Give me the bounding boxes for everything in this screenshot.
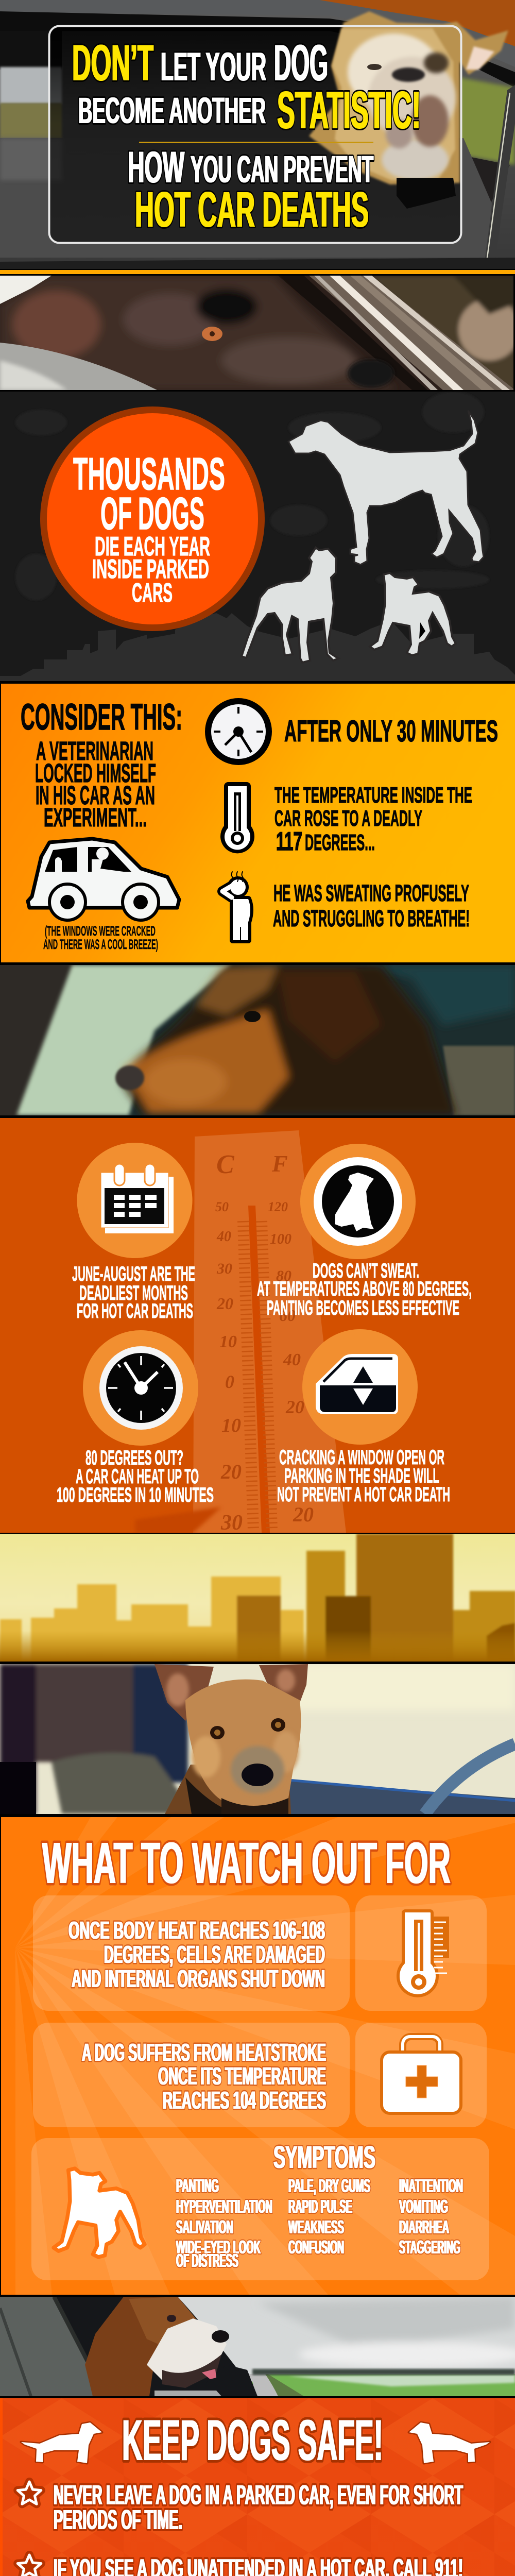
symptoms list: HYPERVENTILATION [176,2196,272,2217]
panel: deadly facts [0,1118,515,1535]
card: thermometer icon [355,1895,487,2011]
icon: dachshund left [21,2422,102,2463]
circle: thousands of dogs: OF DOGS [100,488,204,539]
icon: clock [205,698,272,765]
icon: bulldog [54,2168,145,2257]
windows note: (THE WINDOWS WERE CRACKED [45,923,156,939]
headline text: LET YOUR [161,44,266,89]
symptoms list: PANTING [176,2175,219,2196]
panel: keep dogs safe [0,2398,515,2576]
fact: calendar: JUNE-AUGUST ARE THE [72,1263,195,1285]
veterinarian text: EXPERIMENT... [44,803,147,832]
tip: never leave [18,2480,463,2535]
circle: thousands of dogs: CARS [132,578,173,608]
thermometer background: 60 [279,1306,296,1325]
circle: thousands of dogs: THOUSANDS [73,448,225,499]
circle: thousands of dogs [40,406,265,631]
headline text: DOG [274,34,328,91]
panel: thousands of dogs [0,392,515,681]
fact: calendar [72,1143,195,1323]
icon: sweating man [222,872,250,943]
card: heatstroke: REACHES 104 DEGREES [163,2087,326,2114]
thermometer background: 40 [283,1350,301,1369]
thermometer background: 20 [285,1397,304,1417]
thermometer background: C [216,1150,235,1179]
photo: black dog in car window [0,276,515,390]
fact: car heat clock: A CAR CAN HEAT UP TO [76,1465,199,1488]
circle: thousands of dogs: DIE EACH YEAR [95,532,210,562]
panel: consider this [1,684,515,962]
photo: beagle out of car window [0,2297,515,2396]
consider this heading: CONSIDER THIS: [21,697,182,738]
headline text: BECOME ANOTHER [78,91,266,131]
photo: hazy city skyline [0,1534,515,1668]
fact: car heat clock: 80 DEGREES OUT? [85,1447,183,1469]
card: heatstroke [33,2023,350,2127]
symptoms list: WEAKNESS [288,2216,344,2238]
sun rays background [15,1817,515,2295]
headline text: DON’T [72,34,153,91]
city skyline [0,613,515,681]
thermometer background: 40 [216,1229,231,1245]
temperature text: 117 [276,827,302,856]
thermometer background: F [271,1150,288,1177]
thermometer background: 30 [220,1511,243,1535]
headline text: HOW [128,143,184,192]
veterinarian text: LOCKED HIMSELF [35,758,156,788]
silhouette: medium dog [242,548,338,663]
veterinarian text [35,736,156,832]
symptoms list: CONFUSION [288,2236,344,2258]
thermometer background [135,1130,346,1535]
card: first aid icon [355,2023,487,2127]
fact: car heat clock: 100 DEGREES IN 10 MINUTES [57,1484,214,1506]
silhouette: large dog [288,411,484,565]
circle: thousands of dogs: INSIDE PARKED [92,554,209,584]
hero text panel [49,26,461,243]
thermometer background: 100 [270,1231,291,1247]
thermometer background: 0 [225,1371,234,1392]
hero car photo [0,0,515,269]
icon: car [28,839,179,920]
tip: never leave: PERIODS OF TIME. [54,2504,182,2535]
card: symptoms [31,2138,489,2280]
headline text [72,34,421,238]
temperature text [274,783,472,856]
symptoms list: VOMITING [399,2196,448,2217]
symptoms list: DIARRHEA [399,2216,449,2238]
card: body heat [33,1895,350,2011]
panel: what to watch out for [1,1817,515,2295]
panel: consider this: AND THERE WAS A COOL BREEZE) [43,937,158,952]
card: heatstroke: ONCE ITS TEMPERATURE [158,2063,326,2090]
symptoms list: PALE, DRY GUMS [288,2175,370,2196]
fact: calendar: FOR HOT CAR DEATHS [77,1300,193,1323]
sweating text [273,880,470,931]
thermometer background: 10 [221,1415,241,1436]
photo: terrier resting on window [0,965,515,1115]
card: body heat: ONCE BODY HEAT REACHES 106-108 [68,1917,325,1944]
thermometer background: 50 [215,1199,229,1214]
hero panel border [49,26,461,243]
thermometer background: 120 [268,1199,288,1214]
temperature text: DEGREES... [305,830,375,855]
symptoms list: OF DISTRESS [176,2250,238,2271]
icon: thermometer [220,782,254,853]
orange divider bar [0,270,515,274]
bulldog photo [309,11,508,209]
fact: cracked window [277,1329,450,1506]
windows note [43,923,158,952]
photo: tan dog looking at camera [0,1664,515,1814]
ghost dogs background [15,392,489,600]
symptoms list: RAPID PULSE [288,2196,352,2217]
veterinarian text: A VETERINARIAN [36,736,153,766]
card: body heat: DEGREES, CELLS ARE DAMAGED [104,1941,325,1969]
fact: dogs can't sweat [257,1144,472,1319]
symptoms list [176,2175,463,2271]
thermometer background: 10 [219,1332,237,1351]
symptoms list: SALIVATION [176,2216,233,2238]
icon: dachshund right [409,2422,490,2463]
thermometer background: 20 [216,1294,233,1313]
silhouette: small dog [370,573,456,655]
thermometer background: 80 [276,1267,291,1284]
symptoms list: WIDE-EYED LOOK [176,2236,261,2258]
veterinarian text: IN HIS CAR AS AN [36,781,155,810]
fact: car heat clock [57,1330,214,1506]
headline divider [139,142,373,143]
hero panel [0,0,515,269]
fact: calendar: DEADLIEST MONTHS [79,1282,188,1304]
symptoms heading: SYMPTOMS [273,2140,375,2175]
thermometer background: 30 [216,1260,232,1277]
thermometer background: 20 [293,1503,314,1526]
thermometer background: 20 [220,1460,242,1483]
